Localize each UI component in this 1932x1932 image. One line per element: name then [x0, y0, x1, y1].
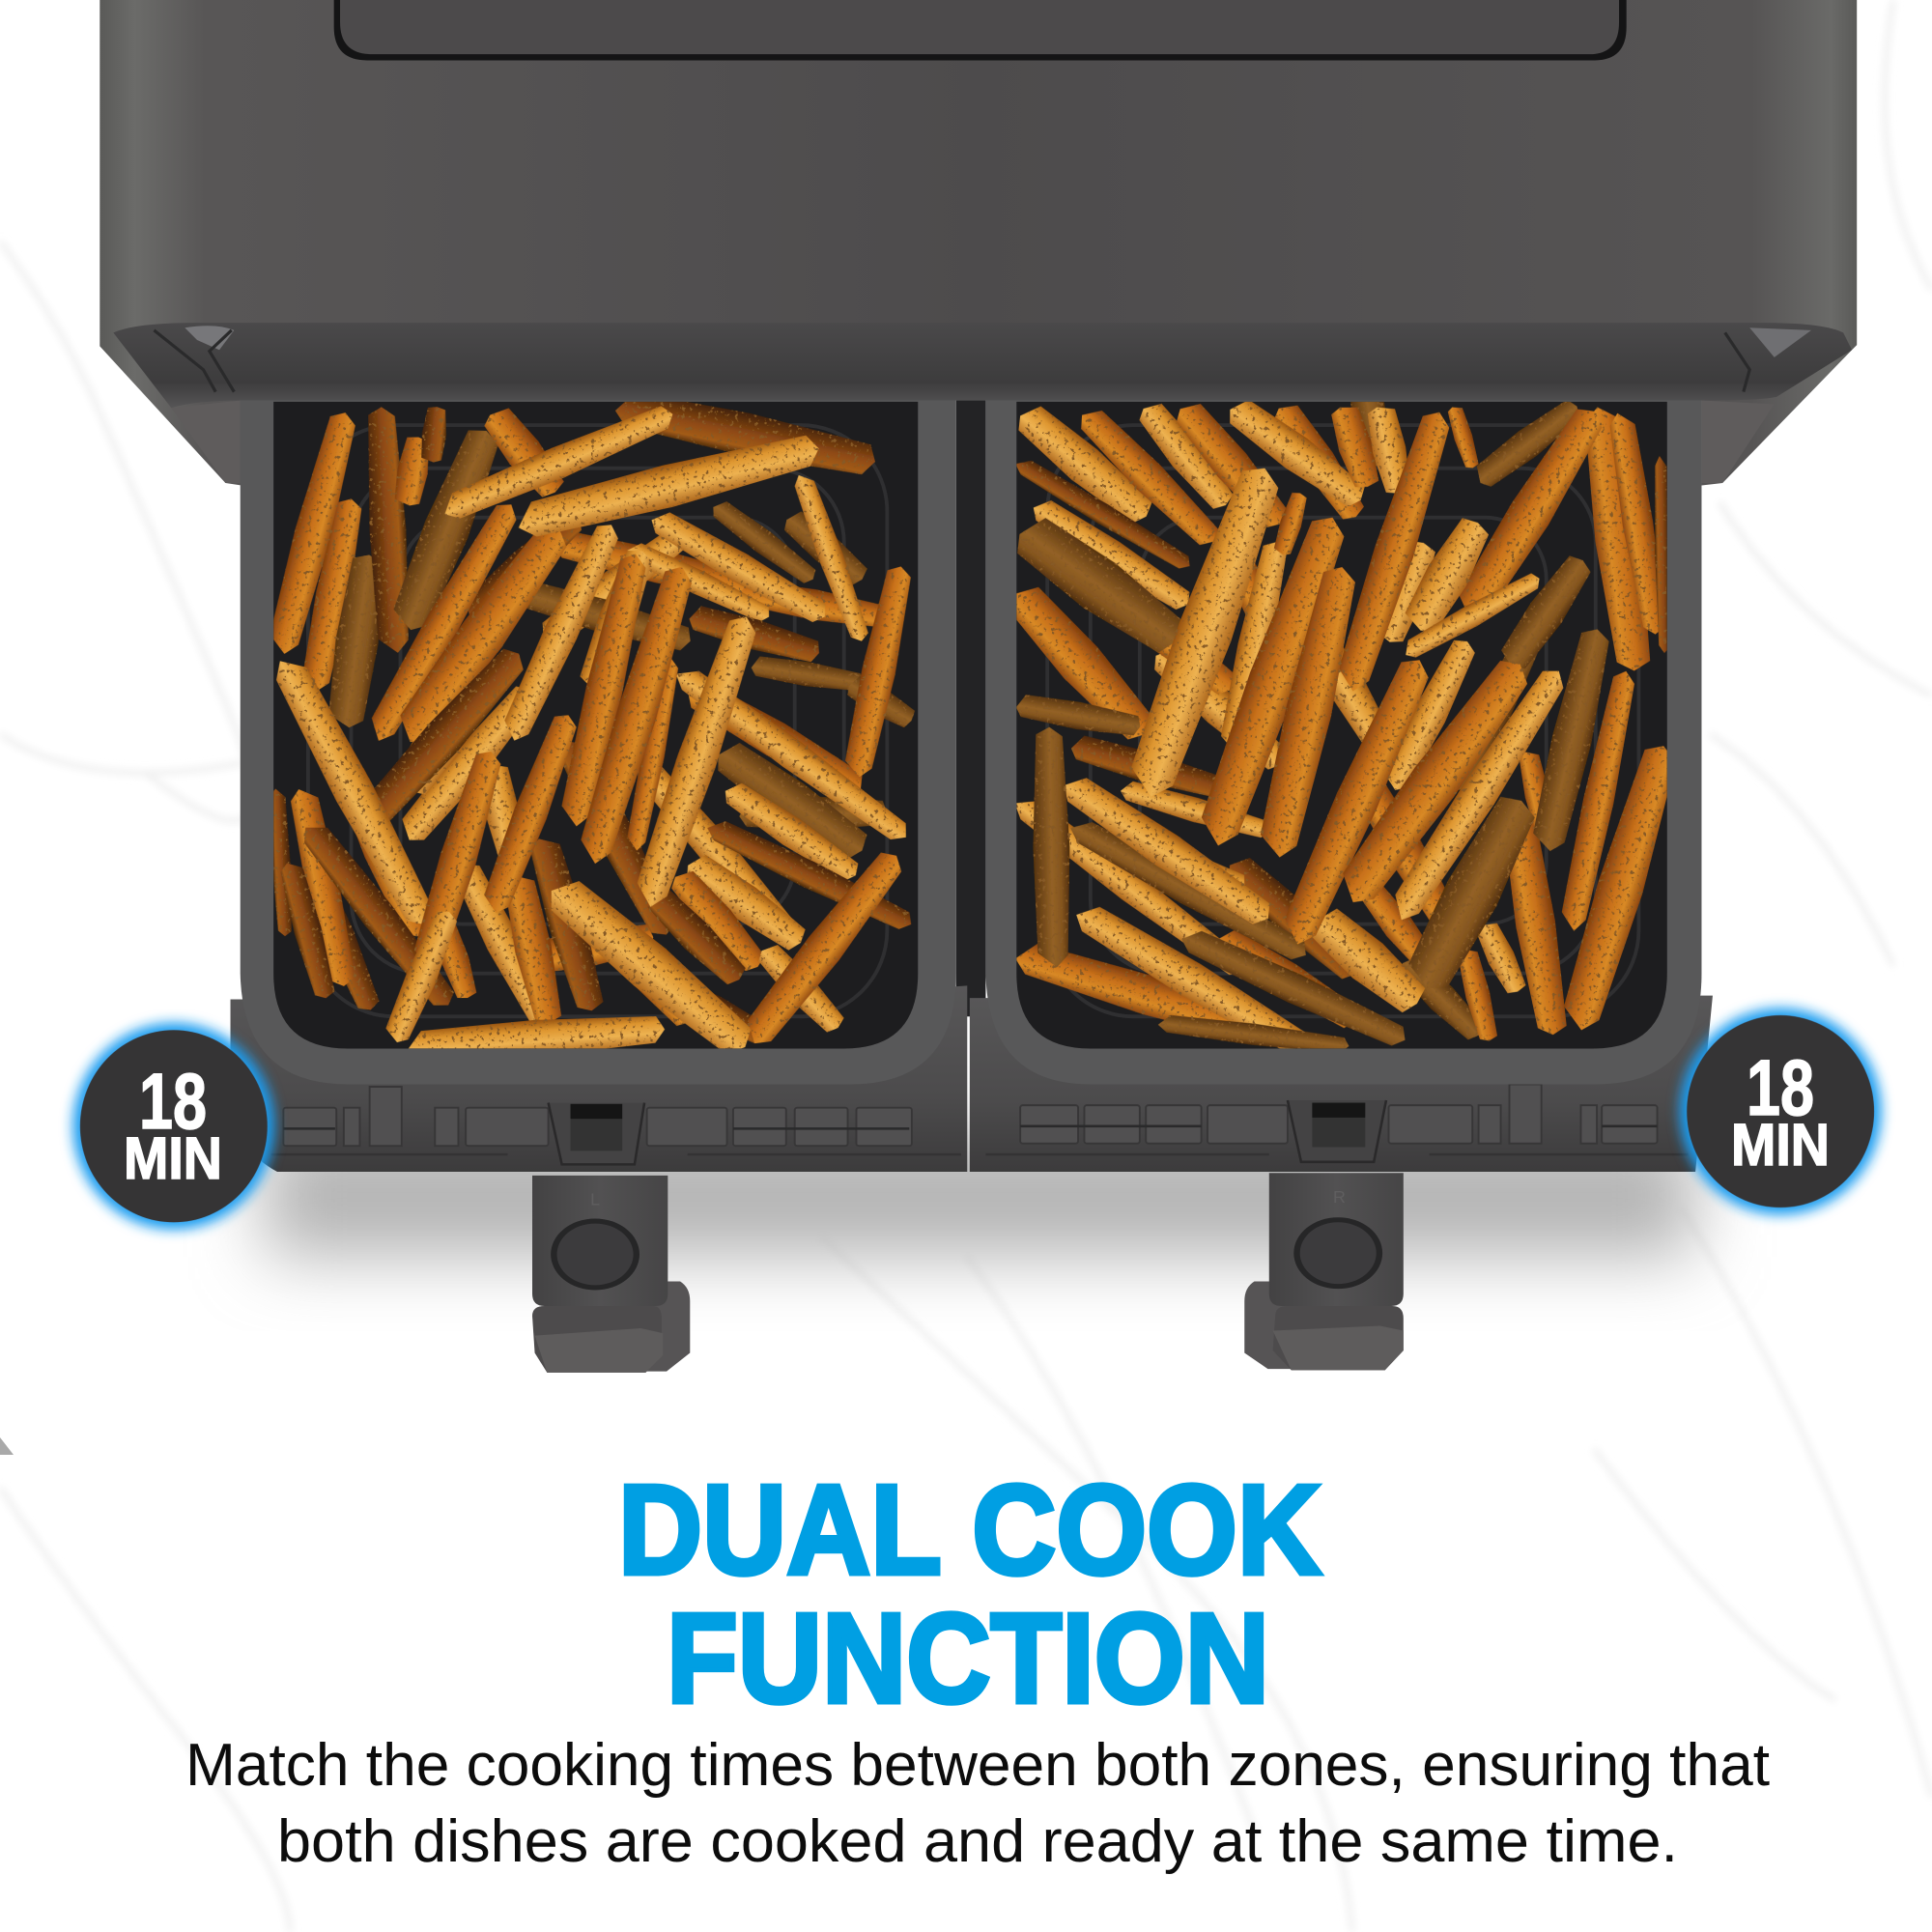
top panel face — [340, 0, 1619, 54]
left badge label: MIN — [124, 1125, 222, 1191]
right badge label — [1731, 1044, 1830, 1178]
air fryer body — [99, 0, 1857, 486]
description text — [185, 1732, 1770, 1875]
fries: right basket — [1016, 402, 1667, 1049]
corner mark at left edge — [0, 1437, 14, 1455]
title: FUNCTION — [667, 1587, 1269, 1729]
right basket rim — [985, 401, 1701, 1084]
right badge disc — [1680, 1008, 1882, 1215]
centre divider — [956, 401, 985, 1016]
fries: left basket — [263, 385, 919, 1065]
title — [618, 1459, 1321, 1729]
right badge label: MIN — [1731, 1112, 1830, 1178]
front band left — [231, 985, 967, 1172]
description text: both dishes are cooked and ready at the same time. — [277, 1808, 1678, 1875]
right basket interior rack — [1016, 402, 1667, 1048]
front band right — [970, 996, 1713, 1172]
title: DUAL COOK — [618, 1459, 1321, 1601]
front lip — [113, 323, 1852, 483]
left badge label — [124, 1058, 222, 1191]
handle label L: L — [590, 1189, 600, 1208]
left badge label: 18 — [139, 1058, 207, 1146]
left basket interior rack — [273, 402, 918, 1048]
right handle — [1244, 1173, 1404, 1370]
left badge disc — [72, 1023, 274, 1230]
right badge label: 18 — [1747, 1044, 1814, 1132]
description text: Match the cooking times between both zones, ensuring that — [185, 1732, 1770, 1799]
left basket rim — [241, 401, 956, 1084]
left handle — [532, 1176, 690, 1373]
control panel recess — [334, 0, 1627, 60]
shadow beneath the air fryer — [265, 1133, 1694, 1257]
handle label R: R — [1333, 1187, 1346, 1207]
